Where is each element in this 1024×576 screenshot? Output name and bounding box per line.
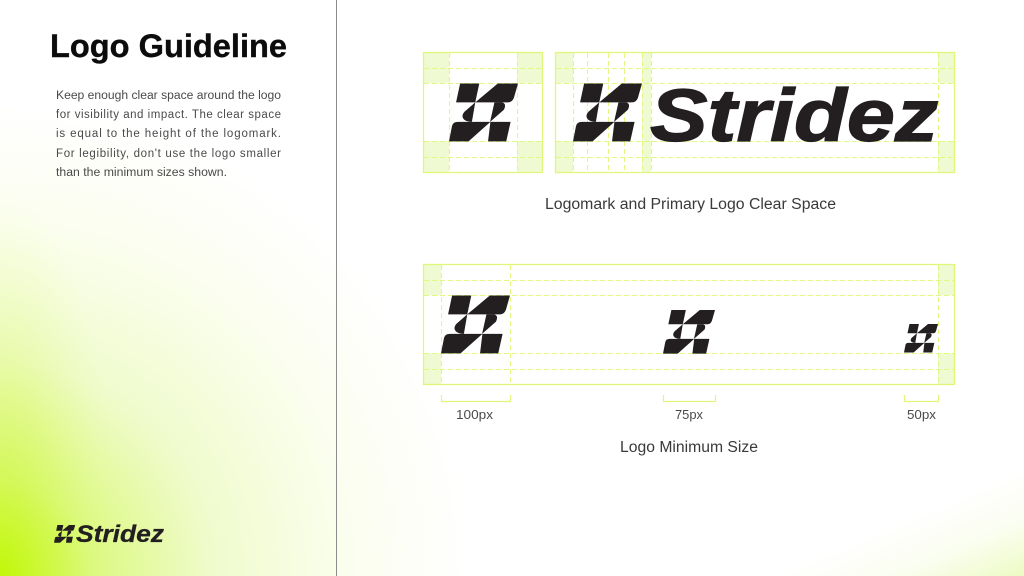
- wordmark: footer: Stridez: [76, 521, 164, 548]
- icon: logomark 50px: [904, 324, 938, 353]
- title: Logo Guideline: [50, 28, 287, 64]
- body text: for visibility and impact. The clear space: [56, 109, 281, 121]
- icon: footer logomark: [54, 525, 75, 543]
- size bracket: 100px: 100px: [456, 407, 494, 422]
- size bracket: 75px: 75px: [675, 407, 703, 422]
- footer logo: [54, 521, 164, 548]
- body text: For legibility, don't use the logo smaller: [56, 148, 281, 160]
- panel: logomark clear space: [424, 52, 542, 172]
- body text: than the minimum sizes shown.: [56, 167, 227, 179]
- body text: Keep enough clear space around the logo: [56, 90, 281, 102]
- icon: logomark: [449, 84, 518, 141]
- panel: primary logo clear space: [556, 52, 954, 172]
- vertical divider: [336, 0, 337, 576]
- size bracket: 75px: [664, 395, 716, 422]
- caption: minimum size: Logo Minimum Size: [620, 439, 758, 456]
- icon: logomark 100px: [441, 296, 510, 353]
- body text: is equal to the height of the logomark.: [56, 128, 281, 140]
- size bracket: 50px: 50px: [907, 407, 937, 422]
- icon: logomark 75px: [663, 310, 715, 354]
- wordmark: Stridez: Stridez: [650, 75, 938, 158]
- icon: logomark in primary logo: [573, 84, 642, 141]
- size bracket: 50px: [904, 395, 938, 422]
- size bracket: 100px: [442, 395, 510, 422]
- body text: [56, 90, 281, 179]
- caption: clear space: Logomark and Primary Logo Clear Space: [545, 196, 836, 213]
- panel: minimum size: [424, 264, 954, 385]
